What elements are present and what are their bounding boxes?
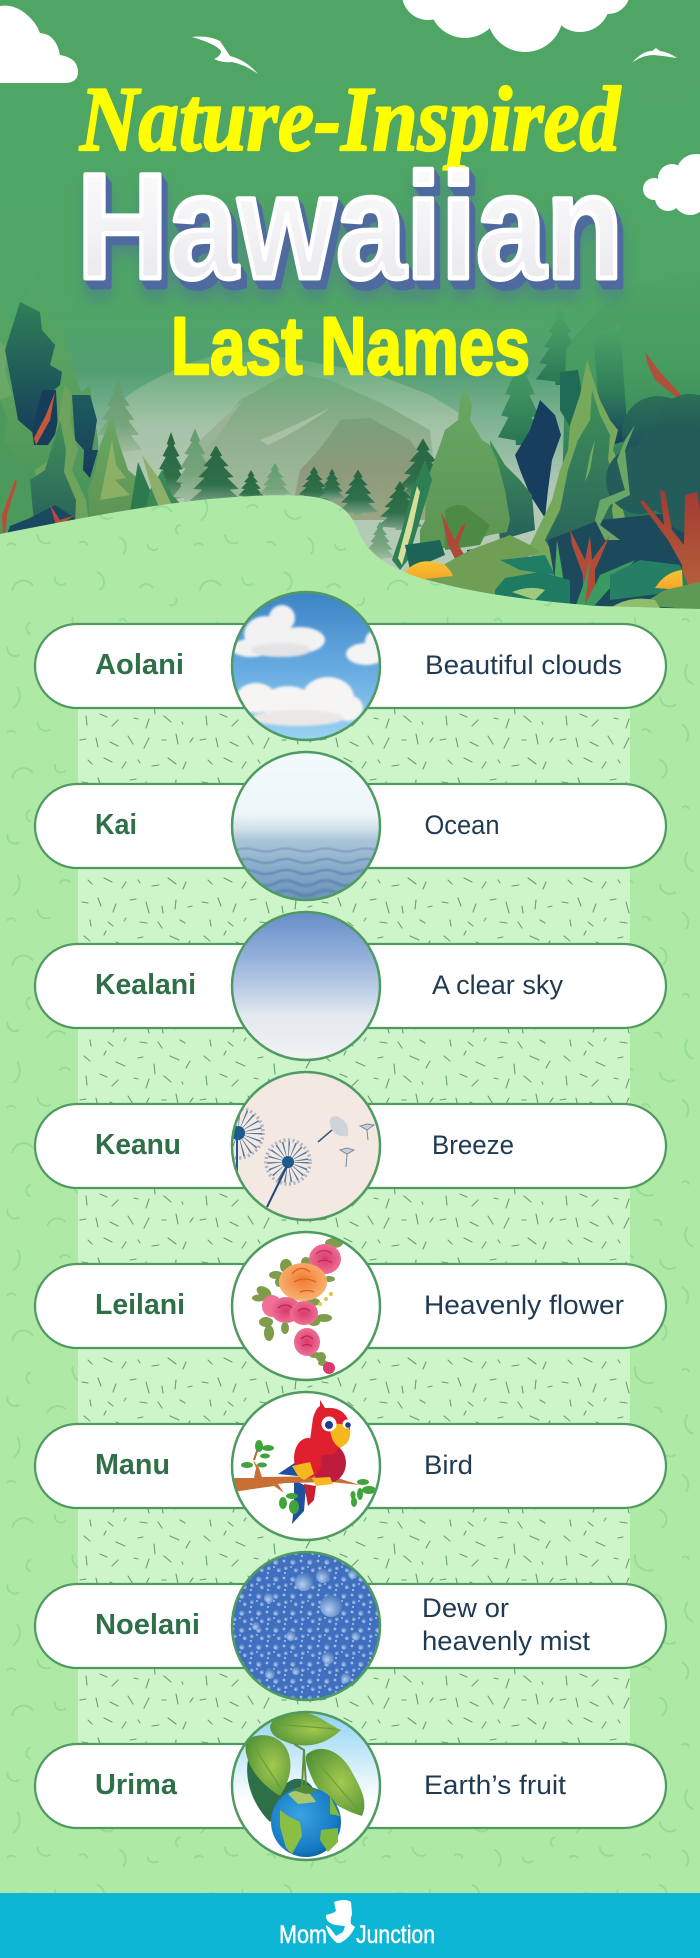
mountains bbox=[120, 352, 470, 520]
name: Noelani bbox=[95, 1609, 200, 1641]
ground with pattern bbox=[0, 495, 700, 1893]
icon: clear sky photo bbox=[231, 911, 381, 1061]
panel: speckled centre band bbox=[78, 690, 630, 1750]
meaning: Bird bbox=[424, 1450, 473, 1480]
logo text: Junction: Junction bbox=[356, 1921, 435, 1949]
meaning: line two: heavenly mist bbox=[422, 1626, 591, 1656]
row: Kealani bbox=[35, 911, 666, 1061]
name: Keanu bbox=[95, 1129, 181, 1161]
right forest bbox=[392, 270, 700, 610]
icon: cloud right bbox=[643, 154, 700, 215]
meaning: Breeze bbox=[432, 1130, 514, 1160]
row: Leilani bbox=[35, 1231, 666, 1381]
icon: seagull left bbox=[192, 36, 258, 74]
small conifers bbox=[94, 304, 584, 560]
name: Leilani bbox=[95, 1289, 185, 1321]
icon: cloud top left bbox=[0, 6, 78, 83]
footer band bbox=[0, 1893, 700, 1958]
left forest bbox=[0, 265, 182, 545]
meaning: Heavenly flower bbox=[424, 1290, 624, 1320]
row: Noelani bbox=[35, 1551, 666, 1701]
icon: dandelions bbox=[213, 1071, 381, 1221]
meaning: Beautiful clouds bbox=[425, 650, 622, 680]
pill bbox=[35, 944, 666, 1028]
hero background bbox=[0, 0, 700, 620]
row: Manu bbox=[35, 1391, 666, 1541]
sky bbox=[0, 0, 700, 620]
pill bbox=[35, 784, 666, 868]
pill bbox=[35, 624, 666, 708]
heading: Nature-Inspired: Nature-Inspired bbox=[79, 68, 622, 170]
icon: clouds photo bbox=[231, 591, 386, 741]
icon: parrot on branch bbox=[231, 1391, 381, 1541]
pill bbox=[35, 1104, 666, 1188]
icon: ocean photo bbox=[231, 751, 381, 901]
icon: mother and child bbox=[326, 1900, 355, 1943]
meaning: A clear sky bbox=[432, 970, 563, 1000]
meaning: line one: Dew or bbox=[422, 1593, 509, 1623]
row: Urima bbox=[35, 1711, 666, 1861]
pill bbox=[35, 1744, 666, 1828]
pill bbox=[35, 1584, 666, 1668]
icon: seagull right bbox=[632, 48, 677, 63]
row: Keanu bbox=[35, 1071, 666, 1221]
name: Manu bbox=[95, 1449, 170, 1481]
title bbox=[77, 68, 623, 392]
heading: Last Names: Last Names bbox=[171, 301, 530, 392]
name: Kealani bbox=[95, 969, 196, 1001]
logo text: Mom: Mom bbox=[279, 1921, 327, 1949]
icon: dew drops bbox=[231, 1551, 381, 1701]
icon: flowers bbox=[231, 1231, 381, 1381]
icon: earth fruit with leaves bbox=[231, 1711, 381, 1861]
icon: cloud top centre bbox=[402, 0, 630, 52]
name: Urima bbox=[95, 1769, 178, 1801]
logo: MomJunction bbox=[279, 1900, 435, 1949]
row: Kai bbox=[35, 751, 666, 901]
pill bbox=[35, 1264, 666, 1348]
pill bbox=[35, 1424, 666, 1508]
meaning: Earth’s fruit bbox=[424, 1770, 567, 1800]
name: Aolani bbox=[95, 649, 184, 681]
row: Aolani bbox=[35, 591, 666, 741]
meaning: Ocean bbox=[424, 810, 500, 840]
name: Kai bbox=[95, 809, 137, 841]
